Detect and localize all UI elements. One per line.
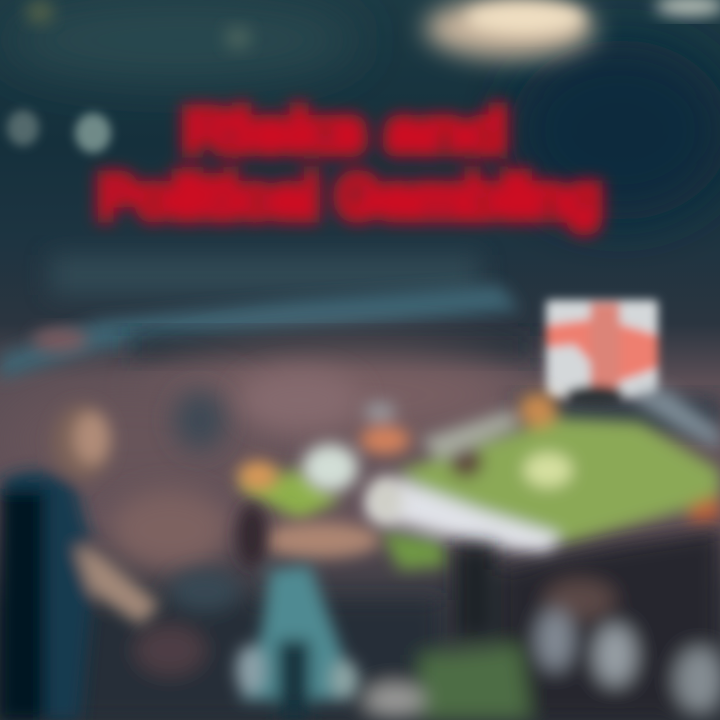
upper stand band [0, 255, 530, 380]
stadium roof and lights [0, 0, 720, 220]
foreground figures [0, 404, 359, 720]
football pitch [240, 392, 720, 570]
scoreboard support [630, 388, 720, 450]
title [98, 97, 602, 232]
crowd [0, 350, 720, 570]
scoreboard [546, 300, 658, 405]
title: Political Gambling [98, 163, 602, 232]
players and flags at pitch edge [238, 402, 410, 558]
title: Risks and [182, 97, 508, 166]
foreground spectators [0, 530, 720, 720]
